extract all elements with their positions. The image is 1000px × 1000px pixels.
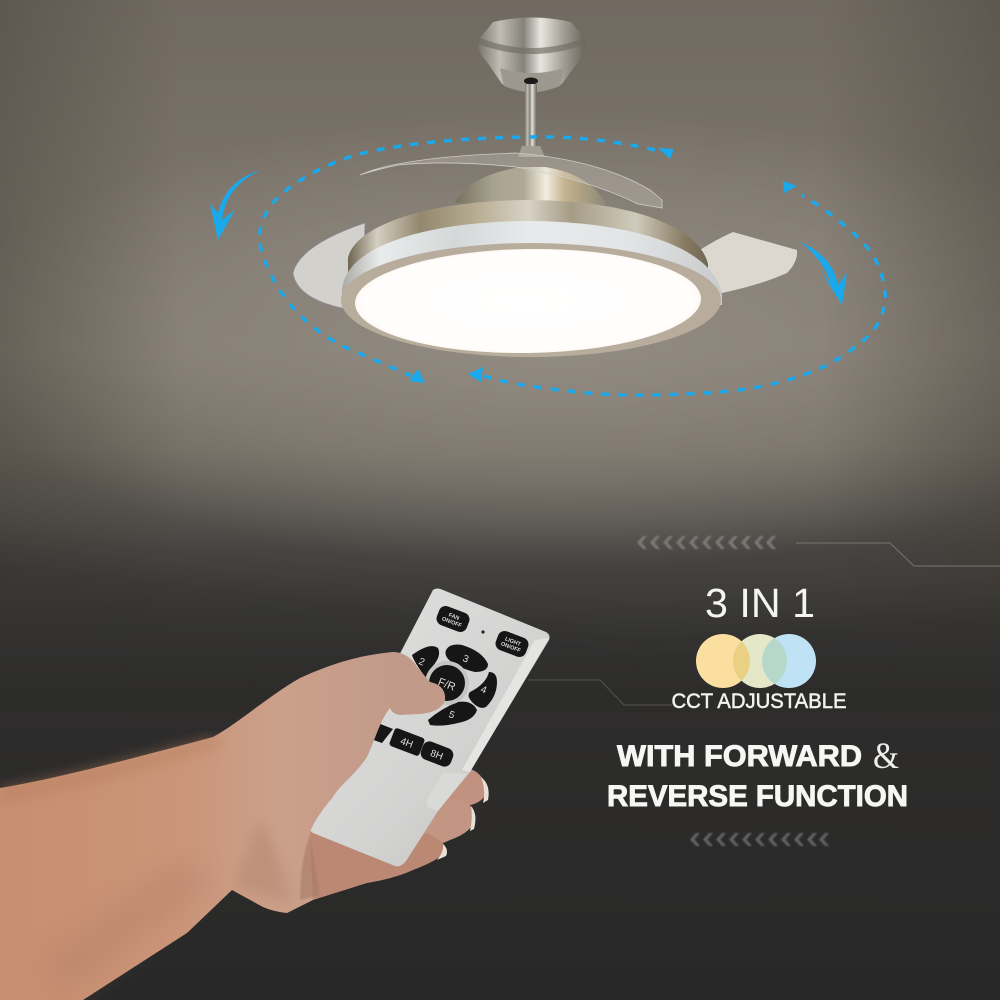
button: 4: [469, 672, 497, 708]
decorative chevrons top: [637, 536, 776, 549]
circuit line left: [528, 680, 672, 705]
text: with forward &: &: [873, 736, 899, 777]
canopy: [478, 18, 586, 92]
left blade: [293, 223, 365, 308]
button: 3: 3: [461, 653, 470, 666]
light panel: [354, 247, 702, 355]
button: partial timer: [368, 721, 393, 743]
button: 4H: [389, 727, 425, 757]
button: 4H: 4H: [399, 736, 414, 751]
button: F/R: F/R: [436, 676, 457, 694]
remote body: [310, 588, 550, 866]
CCT colour circles icon: [696, 634, 816, 688]
button: fan on/off: ON/OFF: [441, 616, 463, 629]
dome housing: [455, 167, 607, 205]
circuit line top right: [796, 543, 1000, 566]
dashed rotation path 1: [260, 137, 674, 383]
large arrow right: [800, 242, 847, 305]
button: light on/off: ON/OFF: [500, 641, 522, 654]
button: 8H: 8H: [429, 748, 444, 763]
ceiling fan: [293, 18, 797, 357]
right blade: [700, 232, 797, 293]
label: CCT adjustable: CCT ADJUSTABLE: [672, 690, 846, 713]
text: with forward &: [617, 736, 899, 777]
dashed rotation path 2: [468, 181, 885, 395]
text: reverse function: REVERSE FUNCTION: [607, 780, 908, 813]
button: 5: 5: [447, 709, 456, 722]
button: fan on/off: [434, 604, 472, 634]
large arrow left: [210, 170, 261, 240]
button: 4: 4: [479, 684, 488, 697]
hand and thumb: [0, 652, 445, 1000]
button: light on/off: [493, 629, 531, 659]
remote side edge: [462, 638, 549, 772]
button: 2: 2: [417, 656, 426, 669]
indicator dot: [481, 630, 485, 634]
remote and hand: [0, 588, 550, 1000]
light rim: [341, 243, 721, 357]
top blade: [360, 153, 662, 208]
down rod: [518, 84, 545, 157]
button: 8H: [419, 739, 455, 769]
fingers behind remote: [305, 768, 489, 900]
rotation arrows: [210, 137, 885, 395]
white ring: [342, 221, 722, 305]
decorative chevrons bottom: [690, 833, 829, 846]
heading: 3 in 1: 3 IN 1: [705, 580, 815, 626]
button: 2: [412, 646, 439, 678]
brushed metal ring: [348, 200, 708, 275]
text: with forward &: WITH FORWARD: [617, 740, 862, 773]
button: light on/off: LIGHT: [504, 636, 522, 648]
button: F/R: [425, 661, 469, 705]
remote clip: [427, 773, 467, 811]
button: 3: [445, 645, 488, 672]
button: fan on/off: FAN: [448, 612, 460, 622]
button: 5: [428, 702, 477, 726]
